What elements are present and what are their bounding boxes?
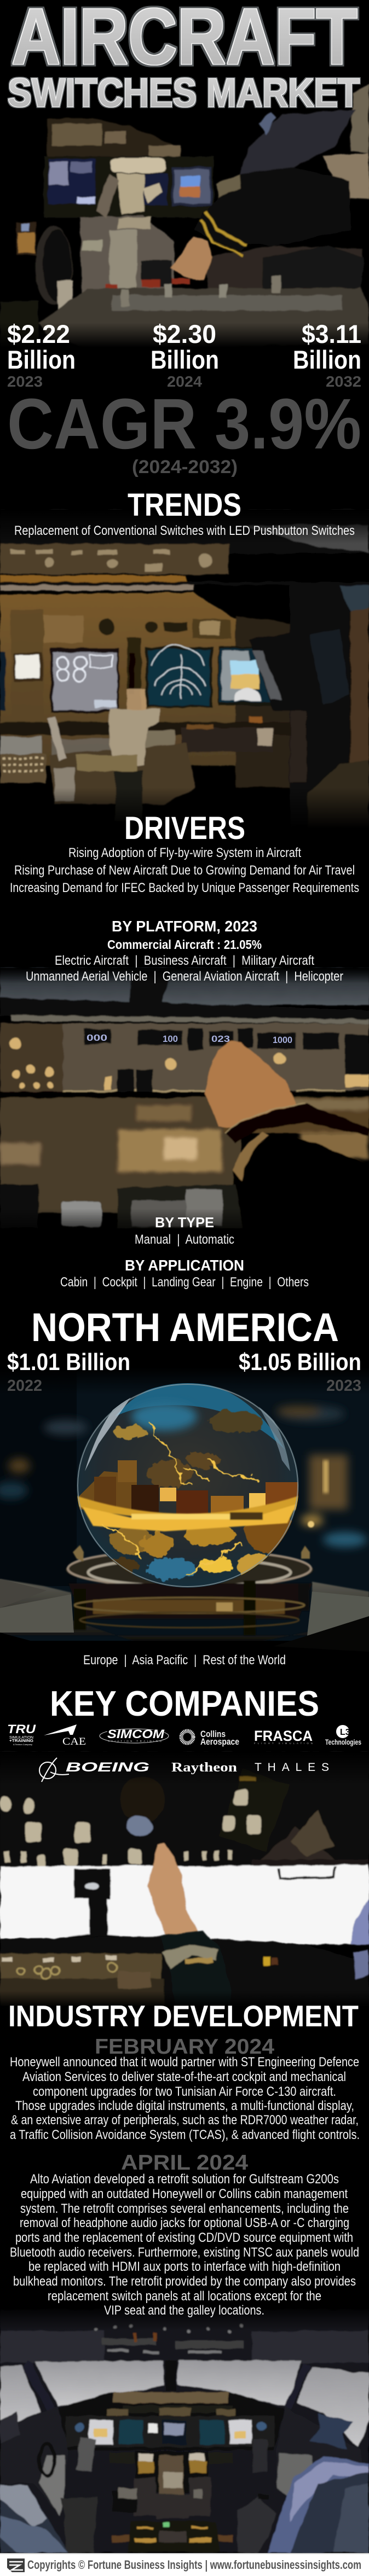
logo: L3 Technologies: L3 bbox=[340, 1728, 350, 1737]
photo: glass globe on stand bbox=[0, 1367, 369, 1679]
april development text bbox=[10, 2172, 359, 2318]
logo: CAE bbox=[44, 1724, 86, 1747]
photo: hand on autopilot panel: 023 bbox=[211, 1034, 230, 1044]
logo: Collins Aerospace bbox=[181, 1729, 239, 1747]
logo: Boeing bbox=[39, 1758, 149, 1782]
market value 2032 bbox=[293, 319, 361, 390]
photo: hand on overhead panel bbox=[0, 1752, 369, 1944]
logo: Boeing: BOEING bbox=[66, 1760, 149, 1775]
lower band of hand photo: glareshield and sleeve bbox=[0, 1931, 369, 2309]
april development text: replacement switch panels at all locations except for the bbox=[48, 2289, 321, 2304]
CAGR period: (2024-2032) bbox=[132, 457, 238, 477]
april development text: VIP seat and the galley locations. bbox=[104, 2303, 264, 2318]
platform list: Electric Aircraft | Business Aircraft | Military Aircraft bbox=[55, 953, 314, 968]
hero photo: pilot hand on throttle bbox=[0, 85, 369, 380]
logo: L3 Technologies bbox=[325, 1725, 361, 1746]
heading: key companies: KEY COMPANIES bbox=[50, 1683, 319, 1723]
leading platform share: Commercial Aircraft : 21.05% bbox=[107, 937, 262, 952]
market value 2024 bbox=[151, 319, 219, 390]
north america value 2022: 2022 bbox=[7, 1377, 42, 1395]
logo: TRU bbox=[7, 1722, 36, 1746]
market value 2032: $3.11 bbox=[302, 319, 361, 348]
photo: full cockpit view bbox=[0, 2305, 369, 2553]
platform list bbox=[26, 953, 343, 984]
north america value 2022: $1.01 Billion bbox=[7, 1349, 130, 1376]
globe stand bbox=[66, 1545, 313, 1635]
footer bar bbox=[0, 2553, 369, 2576]
photo: cockpit instrument panels bbox=[0, 510, 369, 829]
type list: Manual | Automatic bbox=[135, 1232, 234, 1247]
market value 2024: 2024 bbox=[167, 373, 202, 390]
logo: SimCom: AVIATION TRAINING bbox=[108, 1740, 162, 1742]
logo: TRU: +TRAINING bbox=[9, 1739, 34, 1743]
date: april 2024: APRIL 2024 bbox=[121, 2151, 248, 2175]
market value 2023: Billion bbox=[7, 345, 76, 374]
logo: SimCom bbox=[100, 1727, 169, 1743]
market value 2024: $2.30 bbox=[153, 319, 216, 348]
panel: drivers background bbox=[0, 829, 369, 969]
february development text bbox=[10, 2055, 360, 2142]
logo: SimCom: SIMCOM bbox=[107, 1727, 165, 1741]
heading: trends: TRENDS bbox=[128, 487, 241, 523]
logo: Collins Aerospace: Aerospace bbox=[200, 1736, 239, 1747]
logo: Frasca: FRASCA bbox=[254, 1728, 313, 1744]
driver list: Rising Adoption of Fly-by-wire System in Aircraft bbox=[68, 846, 301, 860]
north america value 2022 bbox=[7, 1349, 130, 1395]
logo: TRU: SIMULATION bbox=[9, 1736, 33, 1740]
regions list: Europe | Asia Pacific | Rest of the World bbox=[83, 1653, 286, 1668]
logo: TRU: A Textron Company bbox=[13, 1743, 32, 1746]
heading: drivers: DRIVERS bbox=[124, 811, 245, 846]
north america value 2023: 2023 bbox=[326, 1377, 361, 1395]
logo: Thales: THALES bbox=[255, 1761, 329, 1774]
photo: hand on autopilot panel: 000 bbox=[87, 1033, 107, 1043]
logo: TRU: TRU bbox=[7, 1722, 36, 1736]
driver list bbox=[10, 846, 359, 895]
photo: hand on autopilot panel bbox=[0, 968, 369, 1365]
heading: by platform: BY PLATFORM, 2023 bbox=[112, 918, 257, 935]
heading: north america: NORTH AMERICA bbox=[31, 1306, 339, 1350]
logo: Raytheon: Raytheon bbox=[171, 1761, 237, 1775]
icon: Fortune Business Insights logo bbox=[7, 2558, 25, 2572]
market value 2023: 2023 bbox=[7, 373, 43, 390]
heading: by application: BY APPLICATION bbox=[125, 1257, 244, 1274]
heading: by type: BY TYPE bbox=[155, 1214, 214, 1231]
north america value 2023 bbox=[239, 1349, 361, 1395]
photo: hand on autopilot panel: 1000 bbox=[273, 1035, 292, 1045]
application list: Cabin | Cockpit | Landing Gear | Engine | Others bbox=[60, 1275, 309, 1290]
market value 2032: 2032 bbox=[326, 373, 361, 390]
market value 2023: $2.22 bbox=[7, 319, 70, 348]
market value 2024: Billion bbox=[151, 345, 219, 374]
logo: CAE: CAE bbox=[62, 1736, 86, 1747]
market value 2023 bbox=[7, 319, 76, 390]
logo: Frasca: FLIGHT SIMULATION bbox=[254, 1742, 313, 1745]
photo: hand on autopilot panel: 100 bbox=[163, 1034, 178, 1044]
logo: Collins Aerospace: Collins bbox=[200, 1729, 226, 1739]
date: february 2024: FEBRUARY 2024 bbox=[95, 2035, 274, 2059]
globe bbox=[77, 1382, 299, 1588]
